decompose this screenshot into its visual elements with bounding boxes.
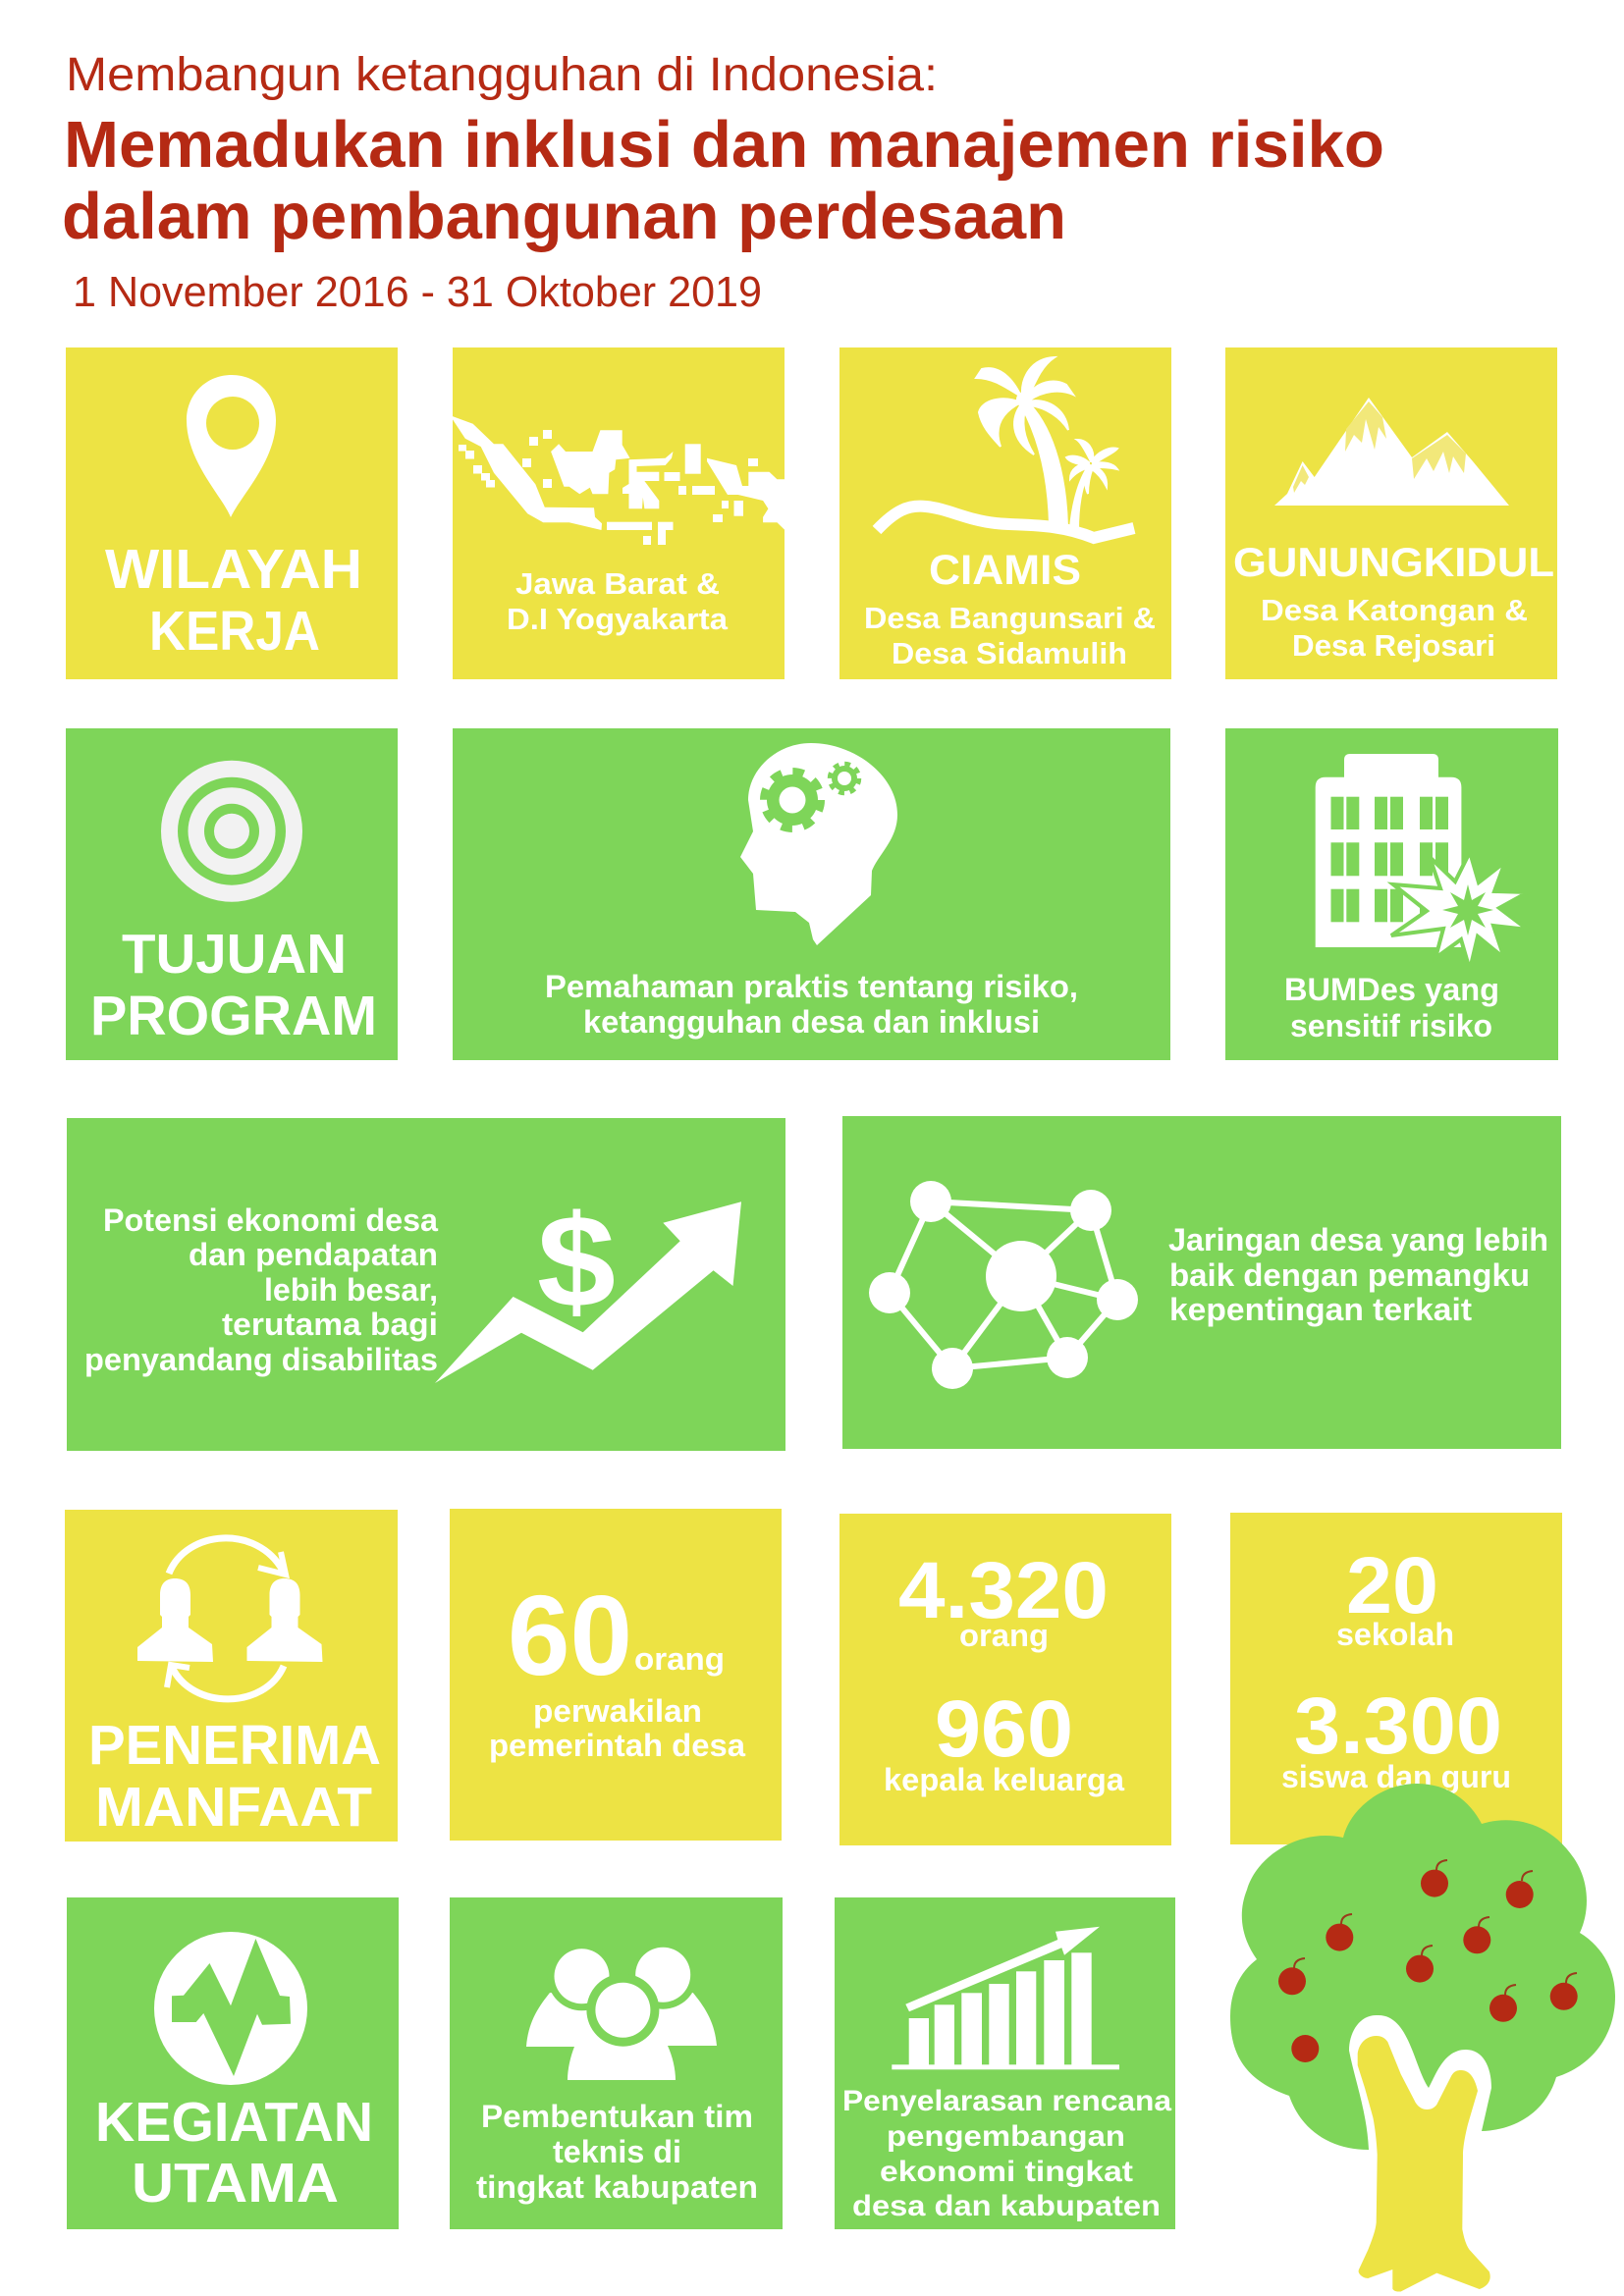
text: potensi ekonomi	[84, 1202, 438, 1377]
text: jawa barat dan yogyakarta	[507, 566, 729, 636]
panel: penerima manfaat	[65, 1510, 398, 1842]
text: potensi ekonomi: Potensi ekonomi desa	[103, 1202, 438, 1238]
icon: mountains	[1274, 398, 1509, 506]
tree trunk	[1358, 2036, 1490, 2292]
icon: rising arrow with dollar: $	[537, 1189, 616, 1335]
panel: jawa barat dan yogyakarta	[453, 347, 785, 679]
text: penyelarasan rencana: Penyelarasan rencana	[842, 2085, 1171, 2117]
text: ciamis: Desa Sidamulih	[892, 636, 1127, 670]
icon: head with gears	[740, 743, 897, 945]
text: jaringan desa: Jaringan desa yang lebih	[1168, 1222, 1548, 1257]
icon: three people	[526, 1941, 717, 2080]
panel: tim teknis	[450, 1897, 783, 2229]
text: jawa barat dan yogyakarta: D.I Yogyakarta	[507, 602, 729, 636]
text: jaringan desa: baik dengan pemangku	[1169, 1257, 1530, 1293]
panel: 60 orang	[450, 1509, 782, 1841]
icon: map of indonesia	[453, 416, 785, 545]
text: perwakilan pemerintah desa: perwakilan	[533, 1693, 702, 1729]
stat: 3.300 siswa dan guru: siswa dan guru	[1281, 1759, 1511, 1794]
text: gunungkidul	[1233, 539, 1554, 663]
panel: wilayah kerja	[66, 347, 398, 679]
illustration: apple tree	[1230, 1784, 1615, 2292]
text: gunungkidul: GUNUNGKIDUL	[1233, 539, 1554, 585]
panel: gunungkidul	[1225, 347, 1557, 679]
stat: 20 sekolah: sekolah	[1336, 1617, 1454, 1652]
heading: wilayah kerja: WILAYAH	[105, 538, 362, 601]
panel: potensi ekonomi	[67, 1118, 785, 1451]
title: main heading line 2: dalam pembangunan perdesaan	[62, 180, 1066, 253]
text: pemahaman risiko: ketangguhan desa dan inklusi	[583, 1004, 1040, 1040]
text: tim teknis: tingkat kabupaten	[476, 2169, 758, 2205]
heading: wilayah kerja: KERJA	[149, 600, 320, 663]
text: penyelarasan rencana: pengembangan	[887, 2120, 1125, 2153]
heading: penerima manfaat: MANFAAT	[95, 1776, 372, 1839]
stat: 20 sekolah	[1336, 1541, 1454, 1652]
icon: target	[161, 761, 302, 902]
text: tim teknis: Pembentukan tim	[481, 2099, 753, 2134]
panel: kegiatan utama	[67, 1897, 399, 2229]
panel: ciamis	[839, 347, 1171, 679]
text: jaringan desa: kepentingan terkait	[1169, 1292, 1472, 1327]
stat: 3.300 siswa dan guru: 3.300	[1294, 1682, 1502, 1771]
stat: 960 kepala keluarga: 960	[935, 1684, 1073, 1774]
text: bumdes: sensitif risiko	[1290, 1008, 1492, 1043]
text: gunungkidul: Desa Katongan &	[1261, 593, 1528, 627]
title: overline: Membangun ketangguhan di Indonesia:	[66, 49, 938, 101]
title: date range: 1 November 2016 - 31 Oktober 2019	[73, 268, 762, 316]
text: pemahaman risiko: Pemahaman praktis tentang risiko,	[545, 969, 1078, 1004]
text: perwakilan pemerintah desa: pemerintah desa	[489, 1728, 745, 1763]
text: jaringan desa	[1168, 1222, 1548, 1327]
text: penyelarasan rencana	[842, 2085, 1171, 2222]
text: gunungkidul: Desa Rejosari	[1292, 628, 1495, 663]
heading: kegiatan utama: UTAMA	[132, 2152, 339, 2215]
text: pemahaman risiko	[545, 969, 1078, 1040]
heading: tujuan program	[90, 923, 377, 1047]
panel: jaringan desa	[842, 1116, 1561, 1449]
stat: 60 orang: orang	[634, 1641, 725, 1677]
title block	[62, 49, 1384, 316]
text: bumdes	[1284, 972, 1499, 1043]
stat: 3.300 siswa dan guru	[1281, 1682, 1511, 1794]
tree canopy	[1230, 1784, 1615, 2150]
apples	[1278, 1860, 1578, 2062]
panel: 20 sekolah dan 3.300 siswa dan guru	[1230, 1513, 1562, 1844]
stat: 20 sekolah: 20	[1346, 1541, 1438, 1630]
text: ciamis: Desa Bangunsari &	[864, 601, 1156, 635]
heading: tujuan program: PROGRAM	[90, 985, 377, 1047]
heading: kegiatan utama	[95, 2091, 373, 2215]
heading: kegiatan utama: KEGIATAN	[95, 2091, 373, 2154]
icon: two people with exchange arrows	[137, 1538, 322, 1699]
stat: 960 kepala keluarga: kepala keluarga	[884, 1762, 1124, 1797]
text: ciamis: CIAMIS	[929, 547, 1081, 594]
heading: penerima manfaat: PENERIMA	[88, 1714, 381, 1777]
stat: 4.320 orang: 4.320	[898, 1546, 1109, 1635]
text: ciamis	[864, 547, 1156, 670]
icon: bar chart with rising arrow	[892, 1927, 1119, 2069]
text: potensi ekonomi: dan pendapatan	[189, 1237, 438, 1272]
text: jawa barat dan yogyakarta: Jawa Barat &	[515, 566, 720, 601]
panel: pemahaman risiko	[453, 728, 1170, 1060]
panel: 4.320 orang dan 960 kepala keluarga	[839, 1514, 1171, 1845]
panel: penyelarasan rencana	[835, 1897, 1175, 2229]
text: tim teknis: teknis di	[553, 2134, 681, 2169]
text: bumdes: BUMDes yang	[1284, 972, 1499, 1007]
stat: 4.320 orang: orang	[959, 1618, 1049, 1653]
panel: bumdes	[1225, 728, 1558, 1060]
icon: rising arrow with dollar	[435, 1189, 741, 1383]
icon: building with explosion	[1316, 754, 1528, 970]
heading: penerima manfaat	[88, 1714, 381, 1839]
title: main heading line 1: Memadukan inklusi dan manajemen risiko	[64, 108, 1384, 182]
text: potensi ekonomi: penyandang disabilitas	[84, 1342, 438, 1377]
icon: palm trees and beach	[877, 357, 1134, 538]
stat: 960 kepala keluarga	[884, 1684, 1124, 1797]
heading: wilayah kerja	[105, 538, 362, 663]
text: tim teknis	[476, 2099, 758, 2205]
panel: tujuan program	[66, 728, 398, 1060]
text: penyelarasan rencana: desa dan kabupaten	[852, 2190, 1161, 2222]
icon: location pin	[187, 375, 276, 517]
text: potensi ekonomi: terutama bagi	[222, 1307, 438, 1342]
icon: pulse in circle	[154, 1932, 307, 2085]
stat: 60 orang	[508, 1572, 725, 1699]
text: perwakilan pemerintah desa	[489, 1693, 745, 1763]
stat: 60 orang: 60	[508, 1572, 632, 1699]
text: penyelarasan rencana: ekonomi tingkat	[880, 2156, 1133, 2188]
text: potensi ekonomi: lebih besar,	[264, 1272, 438, 1308]
icon: network	[869, 1181, 1138, 1389]
heading: tujuan program: TUJUAN	[122, 923, 347, 986]
